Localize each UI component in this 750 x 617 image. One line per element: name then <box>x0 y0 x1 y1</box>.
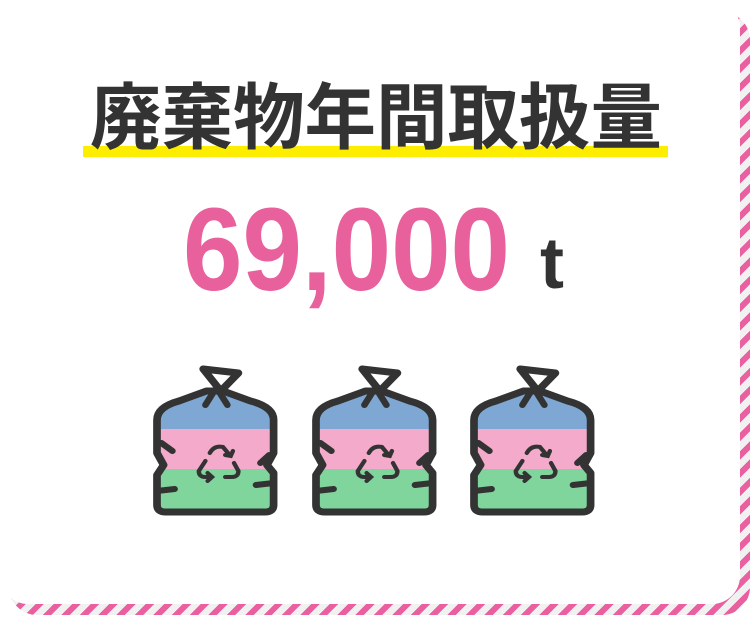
icon: garbage bag 1 <box>146 365 289 519</box>
value: 69,000 <box>183 184 510 316</box>
title highlight bar <box>83 146 668 157</box>
icon: garbage bag 3 <box>463 365 606 519</box>
unit: t <box>540 224 564 304</box>
icon: garbage bag 2 <box>305 365 448 519</box>
title: 廃棄物年間取扱量 <box>90 79 662 159</box>
